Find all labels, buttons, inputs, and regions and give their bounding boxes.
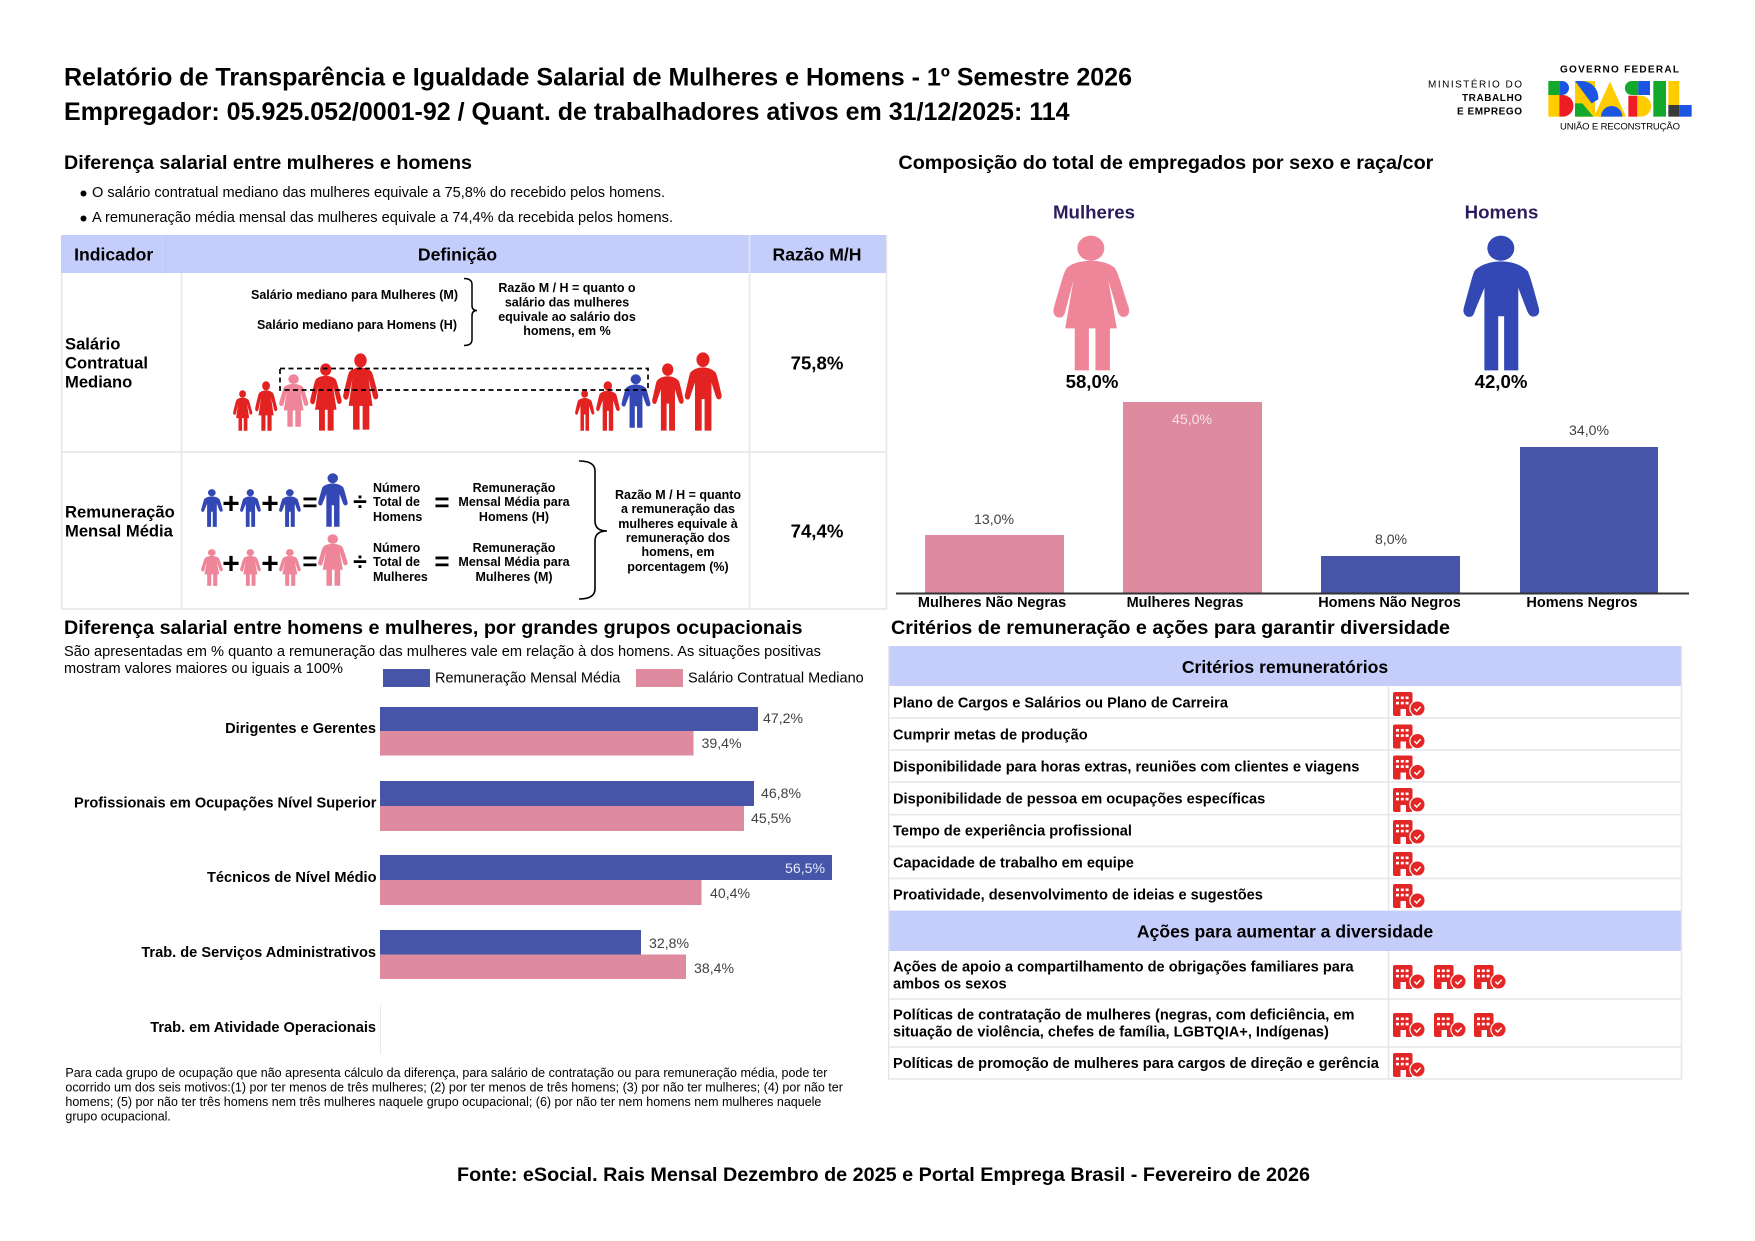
title: [64, 64, 1132, 126]
panel: diferença por grupos ocupacionais: [64, 617, 864, 1124]
heading: critérios: Critérios de remuneração e ações para garantir diversidade: [891, 617, 1450, 639]
label: homens: Homens: [1465, 202, 1538, 222]
definition: salário mediano: salário das mulheres: [505, 296, 629, 310]
footnote: Para cada grupo de ocupação que não apresenta cálculo da diferença, para salário de contratação ou para remuneração média, pode ter: [65, 1066, 827, 1080]
group: serviços administrativos: Trab. de Serviços Administrativos: [141, 945, 376, 961]
row: proatividade: Proatividade, desenvolvimento de ideias e sugestões: [893, 888, 1263, 904]
definition: razão remuneração: [579, 461, 741, 599]
header: critérios remuneratórios: Critérios remuneratórios: [1182, 657, 1388, 677]
legend: [383, 669, 864, 687]
panel: diferença salarial entre mulheres e homens: [61, 152, 887, 609]
formula: mulheres: Mulheres (M): [475, 570, 553, 584]
row: metas: Cumprir metas de produção: [893, 728, 1088, 744]
definition: salário mediano: Salário mediano para Homens (H): [257, 318, 457, 332]
header: ações: Ações para aumentar a diversidade: [1137, 922, 1433, 942]
icons: fila de homens: [575, 352, 722, 431]
bar chart: grupos ocupacionais: [74, 707, 832, 1054]
row: proatividade: [893, 884, 1426, 909]
row: obrigações familiares: ambos os sexos: [893, 976, 1007, 992]
formula: mulheres: =: [302, 546, 318, 576]
row label: salário contratual mediano: Contratual: [65, 354, 148, 372]
definition: salário mediano: homens, em %: [523, 324, 611, 338]
formula: homens: =: [434, 487, 450, 517]
definition: razão remuneração: a remuneração das: [621, 502, 735, 516]
definition: salário mediano: Salário mediano para Mulheres (M): [251, 288, 458, 302]
bar chart: sexo e raça: Mulheres Negras: [1127, 595, 1243, 611]
group: dirigentes e gerentes: 47,2%: [763, 710, 803, 726]
bar chart: sexo e raça: 13,0%: [974, 511, 1014, 527]
row label: salário contratual mediano: [65, 334, 148, 392]
definition: razão remuneração: homens, em: [642, 545, 714, 559]
formula: mulheres: Número: [373, 541, 421, 555]
row: ocupações específicas: [893, 788, 1426, 813]
formula: mulheres: +: [222, 548, 240, 580]
row label: remuneração mensal média: Remuneração: [65, 502, 175, 522]
footnote: ocorrido um dos seis motivos:(1) por ter menos de três mulheres; (2) por ter menos de três homens; (3) por não ter mulheres; (4) por não ter: [65, 1080, 843, 1094]
formula: homens: Total de: [373, 495, 420, 509]
row: horas extras: [893, 756, 1426, 780]
row: experiência: [893, 820, 1426, 845]
title: Relatório de Transparência e Igualdade Salarial de Mulheres e Homens - 1º Semestre 2026: [64, 64, 1132, 92]
value: 75,8%: 75,8%: [791, 352, 844, 374]
bar chart: sexo e raça: 8,0%: [1375, 531, 1408, 547]
group: dirigentes e gerentes: [225, 707, 803, 756]
group: dirigentes e gerentes: Dirigentes e Gerentes: [225, 721, 376, 737]
bar chart: sexo e raça: [896, 402, 1689, 611]
logo: ministério e governo federal: [1428, 64, 1692, 132]
row: equipe: Capacidade de trabalho em equipe: [893, 856, 1134, 872]
definition: salário mediano: equivale ao salário dos: [498, 310, 636, 324]
formula: mulheres: [201, 534, 571, 586]
table: indicador, definição, razão: [61, 235, 887, 609]
formula: mulheres: ÷: [353, 548, 367, 576]
row: ocupações específicas: Disponibilidade de pessoa em ocupações específicas: [893, 792, 1265, 808]
formula: mulheres: =: [434, 546, 450, 576]
formula: mulheres: Mulheres: [373, 570, 428, 584]
value: 74,4%: 74,4%: [791, 520, 844, 542]
header: definição: Definição: [418, 244, 497, 264]
row: plano de cargos: [893, 692, 1426, 717]
row: obrigações familiares: Ações de apoio a compartilhamento de obrigações familiares para: [893, 960, 1355, 976]
group: dirigentes e gerentes: 39,4%: [702, 735, 742, 751]
formula: homens: [201, 473, 571, 527]
title: Empregador: 05.925.052/0001-92 / Quant. de trabalhadores ativos em 31/12/2025: 114: [64, 98, 1070, 126]
group: profissionais nível superior: 46,8%: [761, 785, 801, 801]
row: contratação: Políticas de contratação de mulheres (negras, com deficiência, em: [893, 1008, 1355, 1024]
formula: homens: Remuneração: [473, 481, 556, 495]
icon: homem: [1463, 236, 1539, 370]
source footer: Fonte: eSocial. Rais Mensal Dezembro de 2025 e Portal Emprega Brasil - Fevereiro de 2026: [457, 1164, 1310, 1186]
text block: descrição: [64, 644, 821, 677]
text block: bullets: [80, 185, 673, 226]
text block: descrição: São apresentadas em % quanto a remuneração das mulheres vale em relação à dos homens. As situações positivas: [64, 644, 821, 660]
formula: homens: +: [222, 488, 240, 520]
label: mulheres: Mulheres: [1053, 202, 1135, 222]
footnote: homens; (5) por não ter três homens nem três mulheres naquele grupo ocupacional; (6) por não ter nem homens nem mulheres naquele: [65, 1095, 821, 1109]
group: profissionais nível superior: 45,5%: [751, 810, 791, 826]
row label: remuneração mensal média: [65, 502, 175, 540]
group: serviços administrativos: 32,8%: [649, 935, 689, 951]
group: serviços administrativos: [141, 930, 734, 979]
logo: ministério e governo federal: GOVERNO FEDERAL: [1560, 64, 1679, 76]
formula: mulheres: Mensal Média para: [458, 555, 571, 569]
group: profissionais nível superior: [74, 781, 801, 831]
formula: homens: Homens (H): [479, 510, 549, 524]
bar chart: sexo e raça: Homens Não Negros: [1318, 595, 1461, 611]
bar chart: sexo e raça: 45,0%: [1172, 411, 1212, 427]
bar chart: sexo e raça: Homens Negros: [1526, 595, 1638, 611]
group: atividade operacionais: Trab. em Atividade Operacionais: [150, 1020, 376, 1036]
panel: critérios e ações: [888, 617, 1682, 1079]
value: 58,0%: 58,0%: [1066, 371, 1119, 392]
dashed box: mediana: [280, 368, 648, 390]
formula: mulheres: Total de: [373, 555, 420, 569]
group: profissionais nível superior: Profissionais em Ocupações Nível Superior: [74, 796, 377, 812]
definition: salário mediano: [251, 278, 636, 346]
logo: ministério e governo federal: TRABALHO: [1462, 93, 1522, 104]
row: promoção: [893, 1053, 1426, 1078]
group: serviços administrativos: 38,4%: [694, 960, 734, 976]
legend: Remuneração Mensal Média: [435, 670, 621, 686]
icon: mulher: [1053, 236, 1129, 370]
text block: bullets: A remuneração média mensal das mulheres equivale a 74,4% da recebida pelos homens.: [92, 210, 673, 226]
heading: composição: Composição do total de empregados por sexo e raça/cor: [898, 152, 1434, 174]
row: plano de cargos: Plano de Cargos e Salários ou Plano de Carreira: [893, 696, 1229, 712]
footnote: grupo ocupacional.: [65, 1110, 171, 1124]
formula: homens: =: [302, 487, 318, 517]
formula: homens: Número: [373, 481, 421, 495]
row: contratação: [893, 1008, 1507, 1040]
panel: composição: [896, 152, 1689, 611]
row label: remuneração mensal média: Mensal Média: [65, 522, 174, 540]
bar chart: sexo e raça: Mulheres Não Negras: [918, 595, 1066, 611]
row: obrigações familiares: [893, 960, 1507, 992]
header: razão: Razão M/H: [773, 244, 861, 264]
row: experiência: Tempo de experiência profissional: [893, 824, 1132, 840]
logo: ministério e governo federal: MINISTÉRIO DO: [1428, 78, 1522, 90]
logo: ministério e governo federal: E EMPREGO: [1457, 106, 1522, 118]
heading: grupos ocupacionais: Diferença salarial entre homens e mulheres, por grandes grupos ocupacionais: [64, 617, 803, 639]
formula: mulheres: +: [261, 548, 279, 580]
heading: diferença salarial: Diferença salarial entre mulheres e homens: [64, 152, 472, 174]
value: 42,0%: 42,0%: [1475, 371, 1528, 392]
group: técnicos de nível médio: [207, 855, 832, 905]
row: contratação: situação de violência, chefes de família, LGBTQIA+, Indígenas): [893, 1024, 1329, 1040]
legend: Salário Contratual Mediano: [688, 670, 864, 686]
row: promoção: Políticas de promoção de mulheres para cargos de direção e gerência: [893, 1056, 1380, 1072]
row label: salário contratual mediano: Mediano: [65, 372, 132, 392]
formula: homens: +: [261, 488, 279, 520]
group: técnicos de nível médio: Técnicos de Nível Médio: [207, 870, 377, 886]
text block: descrição: mostram valores maiores ou iguais a 100%: [64, 661, 343, 677]
formula: mulheres: Remuneração: [473, 541, 556, 555]
formula: homens: ÷: [353, 488, 367, 516]
text block: bullets: O salário contratual mediano das mulheres equivale a 75,8% do recebido pelos homens.: [92, 185, 665, 201]
definition: razão remuneração: remuneração dos: [626, 531, 730, 545]
definition: razão remuneração: mulheres equivale à: [618, 517, 738, 531]
row: horas extras: Disponibilidade para horas extras, reuniões com clientes e viagens: [893, 760, 1359, 776]
definition: salário mediano: Razão M / H = quanto o: [498, 281, 636, 295]
bar chart: sexo e raça: 34,0%: [1569, 422, 1609, 438]
formula: homens: Homens: [373, 510, 422, 524]
table: critérios e ações: [888, 646, 1682, 1079]
definition: razão remuneração: Razão M / H = quanto: [615, 488, 741, 502]
header: indicador: Indicador: [74, 244, 153, 264]
row: metas: [893, 724, 1426, 749]
group: técnicos de nível médio: 56,5%: [785, 860, 825, 876]
formula: homens: Mensal Média para: [458, 495, 571, 509]
footnote: [65, 1066, 843, 1124]
logo: ministério e governo federal: UNIÃO E RECONSTRUÇÃO: [1560, 122, 1680, 132]
group: técnicos de nível médio: 40,4%: [710, 885, 750, 901]
icons: fila de mulheres: [233, 353, 378, 431]
row label: salário contratual mediano: Salário: [65, 334, 120, 354]
row: equipe: [893, 852, 1426, 877]
definition: razão remuneração: porcentagem (%): [627, 560, 729, 574]
